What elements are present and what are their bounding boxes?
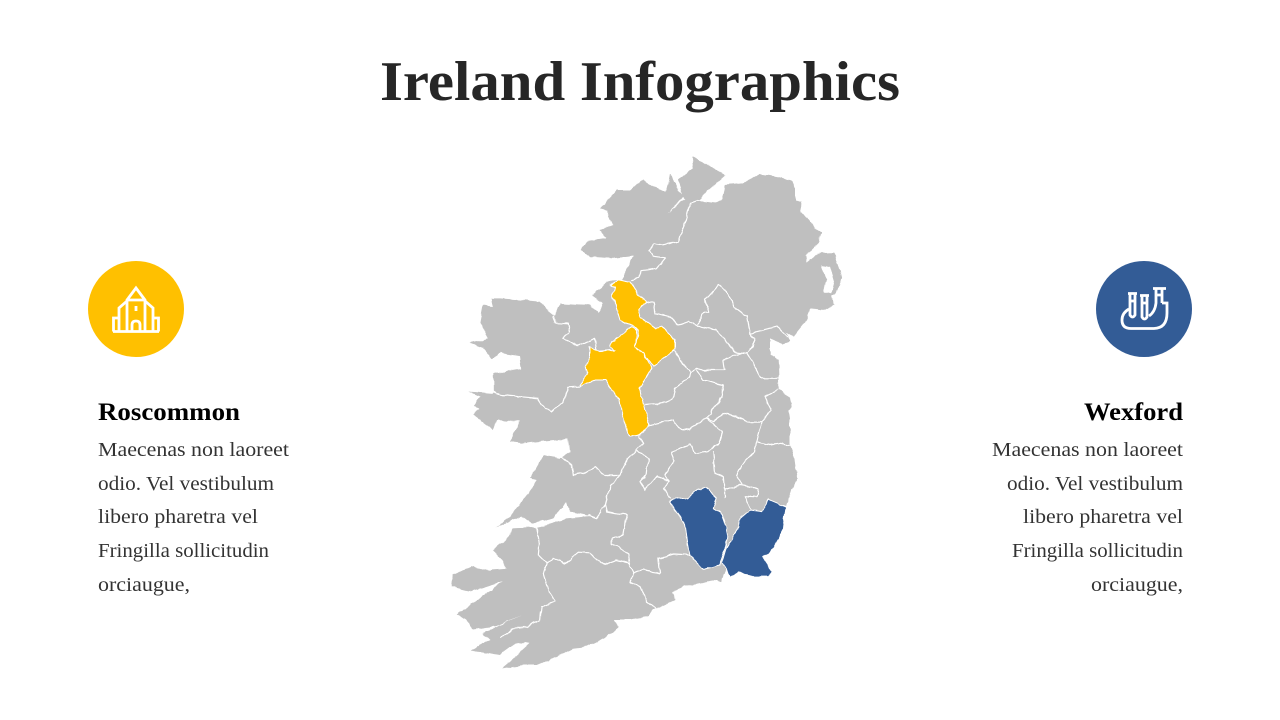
left panel: Roscommon <box>88 261 289 596</box>
right panel: Wexford <box>992 261 1192 596</box>
text block: Wexford description: libero pharetra vel <box>1023 506 1183 528</box>
text block: Roscommon description: orciaugue, <box>98 574 190 596</box>
lakes <box>822 265 835 293</box>
text block: Roscommon description: Maecenas non laoreet <box>98 439 289 461</box>
text block: Roscommon description: Fringilla sollicitudin <box>98 540 269 562</box>
icon: yellow circle with church <box>88 261 184 357</box>
text block: Wexford description: Fringilla sollicitudin <box>1012 540 1183 562</box>
highlighted county: Wexford (blue) <box>722 499 786 578</box>
text block: Roscommon description <box>98 439 289 596</box>
text block: Roscommon description: libero pharetra vel <box>98 506 258 528</box>
highlighted county: Kilkenny (blue) <box>669 487 727 569</box>
icon: blue circle with test tubes <box>1096 261 1192 357</box>
text block: Wexford description: odio. Vel vestibulum <box>1007 473 1183 495</box>
text block: Wexford description <box>992 439 1183 596</box>
text block: Wexford description: orciaugue, <box>1091 574 1183 596</box>
highlighted county: Roscommon (yellow) <box>578 327 652 437</box>
heading: Wexford: Wexford <box>1084 399 1183 426</box>
title: Ireland Infographics <box>380 51 900 113</box>
island outline <box>452 157 842 668</box>
text block: Wexford description: Maecenas non laoreet <box>992 439 1183 461</box>
text block: Roscommon description: odio. Vel vestibulum <box>98 473 274 495</box>
highlighted county: Leitrim (yellow) <box>610 279 675 367</box>
heading: Roscommon: Roscommon <box>98 399 240 426</box>
county borders <box>493 201 790 638</box>
map of Ireland <box>452 157 842 668</box>
